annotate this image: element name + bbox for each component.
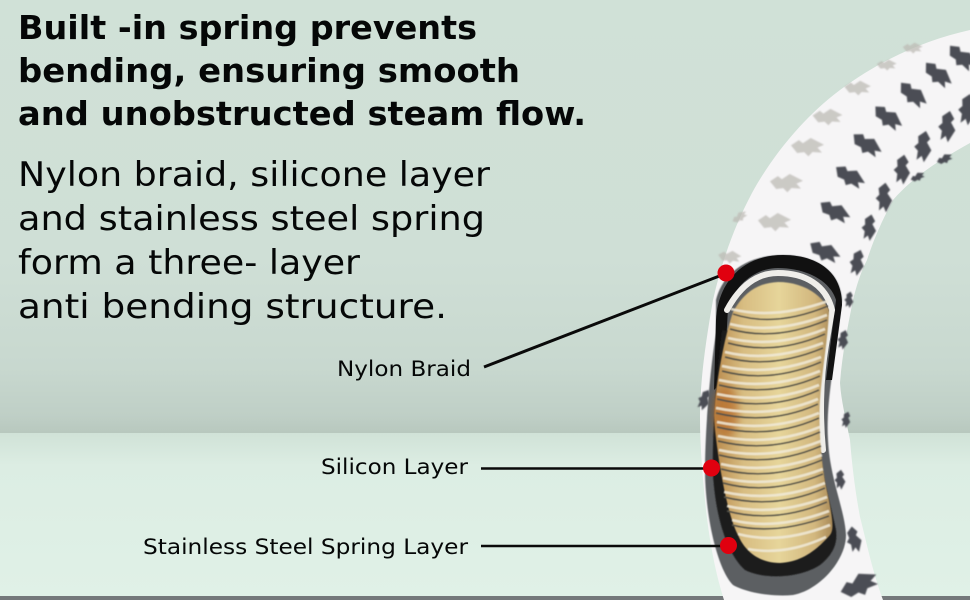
description text: and stainless steel spring bbox=[18, 199, 485, 239]
steel spring core bbox=[714, 282, 832, 563]
description text: anti bending structure. bbox=[18, 287, 447, 327]
description text bbox=[18, 155, 490, 327]
heading bbox=[18, 8, 586, 133]
description text: Nylon braid, silicone layer bbox=[18, 155, 490, 195]
spring core fill bbox=[714, 282, 832, 563]
bottom edge strip bbox=[0, 596, 970, 600]
callout: stainless steel spring layer bbox=[143, 535, 737, 559]
hose illustration bbox=[697, 30, 970, 600]
background floor bbox=[0, 433, 970, 596]
label: Nylon Braid bbox=[337, 357, 471, 381]
leader line bbox=[484, 275, 722, 367]
heading: bending, ensuring smooth bbox=[18, 51, 520, 90]
orange shading on spring bbox=[714, 386, 738, 438]
white inner ring bbox=[727, 273, 832, 450]
hose white braid body bbox=[700, 30, 970, 600]
background wall bbox=[0, 0, 970, 433]
heading: Built -in spring prevents bbox=[18, 8, 477, 47]
red marker bbox=[720, 537, 737, 554]
black inner cavity bbox=[713, 330, 836, 576]
callout: silicon layer bbox=[321, 455, 720, 479]
callout: nylon braid bbox=[337, 264, 734, 381]
label: Silicon Layer bbox=[321, 455, 468, 479]
leader line bbox=[481, 545, 722, 547]
coil wires bbox=[716, 306, 829, 529]
silicone layer: outer ring bbox=[705, 255, 846, 595]
braid pattern: dark diamonds bbox=[697, 43, 970, 600]
heading: and unobstructed steam flow. bbox=[18, 94, 586, 133]
black band at hose top bbox=[714, 255, 842, 390]
leader line bbox=[481, 467, 706, 470]
description text: form a three- layer bbox=[18, 243, 360, 283]
red marker bbox=[718, 264, 734, 282]
coil highlights bbox=[716, 301, 830, 551]
braid pattern: faded diamonds bbox=[718, 40, 924, 265]
label: Stainless Steel Spring Layer bbox=[143, 535, 468, 559]
red marker bbox=[703, 460, 720, 476]
